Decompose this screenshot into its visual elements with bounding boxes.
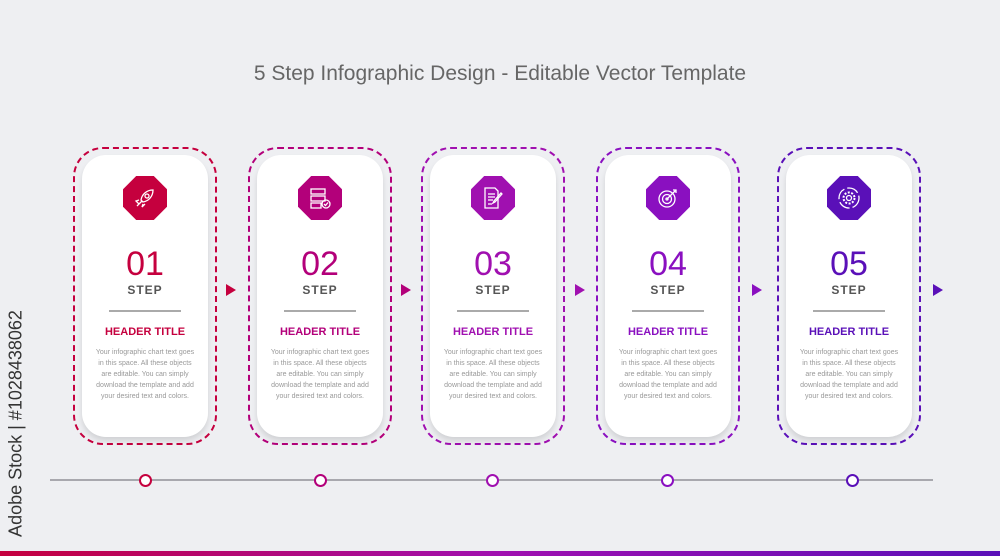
arrow 5 xyxy=(933,284,943,296)
timeline dot 4 xyxy=(661,474,674,487)
arrow 3 xyxy=(575,284,585,296)
step 5: STEP xyxy=(831,283,867,297)
timeline dot 1 xyxy=(139,474,152,487)
step 4 xyxy=(596,147,740,445)
step 2 xyxy=(248,147,392,445)
step 4: Your infographic chart text goes in this space. All these objects are editable. You can simply download the template and add your desired text and colors. xyxy=(619,349,717,400)
timeline dot 5 xyxy=(846,474,859,487)
step 4: STEP xyxy=(650,283,686,297)
arrow 2 xyxy=(401,284,411,296)
step 3: STEP xyxy=(475,283,511,297)
step 1: STEP xyxy=(127,283,163,297)
step 5 xyxy=(777,147,921,445)
icon: server check xyxy=(298,176,342,220)
step 1 xyxy=(73,147,217,445)
icon: rocket xyxy=(123,176,167,220)
step 1: 01 xyxy=(126,245,164,283)
step 3: HEADER TITLE xyxy=(453,326,533,338)
step 3: Your infographic chart text goes in this space. All these objects are editable. You can simply download the template and add your desired text and colors. xyxy=(444,349,542,400)
title: 5 Step Infographic Design - Editable Vector Template xyxy=(254,62,746,85)
icon: document pen xyxy=(471,176,515,220)
step 5: Your infographic chart text goes in this space. All these objects are editable. You can simply download the template and add your desired text and colors. xyxy=(800,349,898,400)
timeline xyxy=(50,479,933,481)
step 2: Your infographic chart text goes in this space. All these objects are editable. You can simply download the template and add your desired text and colors. xyxy=(271,349,369,400)
step 4: 04 xyxy=(649,245,687,283)
timeline dot 3 xyxy=(486,474,499,487)
bottom gradient bar xyxy=(0,551,1000,556)
step 3: 03 xyxy=(474,245,512,283)
step 2: HEADER TITLE xyxy=(280,326,360,338)
step 1: HEADER TITLE xyxy=(105,326,185,338)
step 3 xyxy=(421,147,565,445)
timeline dot 2 xyxy=(314,474,327,487)
watermark text: Adobe Stock | #1028438062 xyxy=(6,310,26,537)
icon: gear cycle xyxy=(827,176,871,220)
step 2: STEP xyxy=(302,283,338,297)
step 2: 02 xyxy=(301,245,339,283)
arrow 1 xyxy=(226,284,236,296)
icon: target xyxy=(646,176,690,220)
step 1: Your infographic chart text goes in this space. All these objects are editable. You can simply download the template and add your desired text and colors. xyxy=(96,349,194,400)
step 5: HEADER TITLE xyxy=(809,326,889,338)
arrow 4 xyxy=(752,284,762,296)
step 4: HEADER TITLE xyxy=(628,326,708,338)
step 5: 05 xyxy=(830,245,868,283)
